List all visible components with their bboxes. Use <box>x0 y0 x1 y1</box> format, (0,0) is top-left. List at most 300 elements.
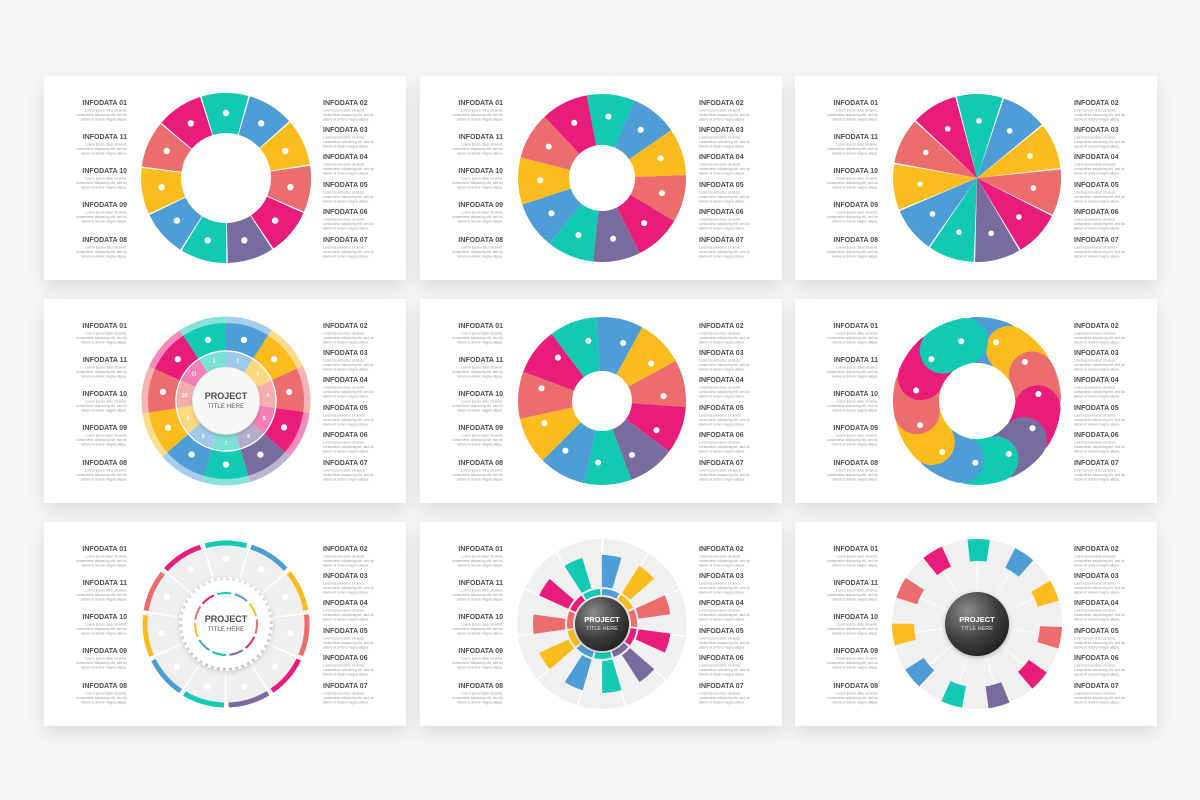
text column left: labore et dolore magna aliqua. <box>457 597 503 601</box>
text column right: INFODATA 06 <box>1074 432 1119 439</box>
text column right: consectetur adipiscing elit, sed do <box>1074 113 1125 117</box>
text column left: Lorem ipsum dolor sit amet, <box>461 108 503 112</box>
text column right: labore et dolore magna aliqua. <box>1074 645 1120 649</box>
text column right: labore et dolore magna aliqua. <box>1074 340 1120 344</box>
text column left: INFODATA 08 <box>82 683 127 690</box>
text column left: labore et dolore magna aliqua. <box>832 631 878 635</box>
text column left: labore et dolore magna aliqua. <box>832 117 878 121</box>
swirl donut chart <box>541 340 663 462</box>
text column right: Lorem ipsum dolor sit amet, <box>323 636 365 640</box>
text column left: INFODATA 09 <box>82 202 127 209</box>
text column left: labore et dolore magna aliqua. <box>832 665 878 669</box>
text column left: Lorem ipsum dolor sit amet, <box>836 434 878 438</box>
text column left: Lorem ipsum dolor sit amet, <box>836 366 878 370</box>
text column left: INFODATA 11 <box>83 134 127 141</box>
text column right: INFODATA 02 <box>699 546 744 553</box>
text column right: consectetur adipiscing elit, sed do <box>1074 336 1125 340</box>
text column left: consectetur adipiscing elit, sed do <box>76 215 127 219</box>
panel background <box>795 76 1157 280</box>
text column right: Lorem ipsum dolor sit amet, <box>1074 414 1116 418</box>
text column right: consectetur adipiscing elit, sed do <box>323 445 374 449</box>
text column right: Lorem ipsum dolor sit amet, <box>699 554 741 558</box>
text column left: Lorem ipsum dolor sit amet, <box>836 554 878 558</box>
text column left: INFODATA 09 <box>833 648 878 655</box>
panel background <box>44 76 406 280</box>
text column left: INFODATA 09 <box>458 425 503 432</box>
text column left: consectetur adipiscing elit, sed do <box>827 250 878 254</box>
text column right: Lorem ipsum dolor sit amet, <box>323 554 365 558</box>
text column right: labore et dolore magna aliqua. <box>323 367 369 371</box>
text column left: labore et dolore magna aliqua. <box>81 340 127 344</box>
text column left: Lorem ipsum dolor sit amet, <box>85 246 127 250</box>
text column right: labore et dolore magna aliqua. <box>323 672 369 676</box>
text column left: labore et dolore magna aliqua. <box>457 374 503 378</box>
step numbers: 7 <box>225 441 228 447</box>
text column right: labore et dolore magna aliqua. <box>699 117 745 121</box>
text column left <box>76 323 127 481</box>
text column right: consectetur adipiscing elit, sed do <box>1074 222 1125 226</box>
text column right: consectetur adipiscing elit, sed do <box>323 363 374 367</box>
text column left: labore et dolore magna aliqua. <box>457 117 503 121</box>
text column right: consectetur adipiscing elit, sed do <box>1074 696 1125 700</box>
text column right: INFODATA 07 <box>1074 683 1119 690</box>
step numbers: 9 <box>186 416 189 422</box>
text column right: labore et dolore magna aliqua. <box>699 226 745 230</box>
text column right: Lorem ipsum dolor sit amet, <box>323 162 365 166</box>
panel background <box>420 299 782 503</box>
text column right: consectetur adipiscing elit, sed do <box>699 250 750 254</box>
text column right: Lorem ipsum dolor sit amet, <box>699 218 741 222</box>
text column left: consectetur adipiscing elit, sed do <box>76 593 127 597</box>
text column left: Lorem ipsum dolor sit amet, <box>85 468 127 472</box>
panel background <box>795 299 1157 503</box>
text column right: INFODATA 07 <box>323 683 368 690</box>
text column right: Lorem ipsum dolor sit amet, <box>1074 608 1116 612</box>
text column left: Lorem ipsum dolor sit amet, <box>461 468 503 472</box>
step numbers: 4 <box>266 393 269 399</box>
icons <box>897 320 1058 480</box>
text column left: Lorem ipsum dolor sit amet, <box>461 210 503 214</box>
icons <box>158 556 294 690</box>
text column left: Lorem ipsum dolor sit amet, <box>85 108 127 112</box>
icons <box>520 318 685 481</box>
colored semicircles <box>549 571 655 677</box>
center title: PROJECT <box>959 615 995 624</box>
text column right: consectetur adipiscing elit, sed do <box>323 418 374 422</box>
text column right: INFODATA 04 <box>699 154 744 161</box>
text column left: consectetur adipiscing elit, sed do <box>827 336 878 340</box>
inner dashed ring <box>188 586 264 662</box>
slide 3: pinwheel pie <box>795 76 1157 280</box>
text column left <box>452 323 503 481</box>
text column right: Lorem ipsum dolor sit amet, <box>1074 468 1116 472</box>
step numbers: 1 <box>213 358 216 364</box>
center title <box>205 614 248 633</box>
text column right: INFODATA 04 <box>1074 154 1119 161</box>
text column right: Lorem ipsum dolor sit amet, <box>699 468 741 472</box>
text column right: INFODATA 02 <box>699 323 744 330</box>
text column right: consectetur adipiscing elit, sed do <box>1074 390 1125 394</box>
text column left: INFODATA 11 <box>834 134 878 141</box>
text column right: labore et dolore magna aliqua. <box>323 117 369 121</box>
text column left: INFODATA 10 <box>833 391 878 398</box>
text column right: consectetur adipiscing elit, sed do <box>1074 363 1125 367</box>
slide 7: star wheel <box>44 522 406 726</box>
text column left: labore et dolore magna aliqua. <box>81 665 127 669</box>
semicircle wheel chart <box>517 539 687 709</box>
text column left: consectetur adipiscing elit, sed do <box>827 215 878 219</box>
text column right: INFODATA 06 <box>1074 209 1119 216</box>
text column left: consectetur adipiscing elit, sed do <box>827 627 878 631</box>
text column right: consectetur adipiscing elit, sed do <box>699 641 750 645</box>
text column left: INFODATA 01 <box>458 323 503 330</box>
text column left: consectetur adipiscing elit, sed do <box>76 473 127 477</box>
text column right: Lorem ipsum dolor sit amet, <box>323 332 365 336</box>
text column right: labore et dolore magna aliqua. <box>699 394 745 398</box>
text column right: INFODATA 07 <box>1074 460 1119 467</box>
text column left <box>452 546 503 704</box>
text column left: Lorem ipsum dolor sit amet, <box>461 692 503 696</box>
text column right: INFODATA 03 <box>1074 573 1119 580</box>
text column left: Lorem ipsum dolor sit amet, <box>836 656 878 660</box>
star wheel chart <box>125 523 327 725</box>
text column right: consectetur adipiscing elit, sed do <box>323 696 374 700</box>
center title: PROJECT <box>205 614 248 624</box>
text column left <box>76 546 127 704</box>
text column right <box>323 100 374 258</box>
text column left: Lorem ipsum dolor sit amet, <box>836 400 878 404</box>
pie chart <box>926 127 1028 229</box>
text column right: labore et dolore magna aliqua. <box>699 144 745 148</box>
text column right: INFODATA 03 <box>699 573 744 580</box>
text column left: INFODATA 09 <box>833 425 878 432</box>
text column right: labore et dolore magna aliqua. <box>323 590 369 594</box>
text column left: INFODATA 09 <box>458 648 503 655</box>
text column right: labore et dolore magna aliqua. <box>1074 617 1120 621</box>
text column left: INFODATA 10 <box>833 614 878 621</box>
text column right: consectetur adipiscing elit, sed do <box>1074 559 1125 563</box>
text column right: labore et dolore magna aliqua. <box>323 477 369 481</box>
text column right: labore et dolore magna aliqua. <box>699 340 745 344</box>
text column right: consectetur adipiscing elit, sed do <box>699 613 750 617</box>
text column left: consectetur adipiscing elit, sed do <box>76 661 127 665</box>
text column right: Lorem ipsum dolor sit amet, <box>1074 332 1116 336</box>
text column right: consectetur adipiscing elit, sed do <box>699 222 750 226</box>
text column left: labore et dolore magna aliqua. <box>832 219 878 223</box>
text column right: labore et dolore magna aliqua. <box>699 645 745 649</box>
text column left: INFODATA 10 <box>82 614 127 621</box>
text column left: Lorem ipsum dolor sit amet, <box>85 434 127 438</box>
colored rim <box>125 523 327 725</box>
text column left: labore et dolore magna aliqua. <box>832 151 878 155</box>
text column right: Lorem ipsum dolor sit amet, <box>699 136 741 140</box>
panel background <box>44 522 406 726</box>
text column left: Lorem ipsum dolor sit amet, <box>85 142 127 146</box>
icons <box>144 318 308 481</box>
text column right: Lorem ipsum dolor sit amet, <box>323 414 365 418</box>
text column right: INFODATA 03 <box>699 127 744 134</box>
text column right: Lorem ipsum dolor sit amet, <box>323 582 365 586</box>
text column right: INFODATA 07 <box>699 460 744 467</box>
text column right: labore et dolore magna aliqua. <box>1074 700 1120 704</box>
slide 6: loop ring <box>795 299 1157 503</box>
text column right: consectetur adipiscing elit, sed do <box>323 336 374 340</box>
text column right: Lorem ipsum dolor sit amet, <box>699 608 741 612</box>
text column left: labore et dolore magna aliqua. <box>81 374 127 378</box>
text column left: Lorem ipsum dolor sit amet, <box>836 622 878 626</box>
text column left <box>76 100 127 258</box>
text column left: labore et dolore magna aliqua. <box>832 254 878 258</box>
text column left: INFODATA 08 <box>458 683 503 690</box>
text column left: INFODATA 11 <box>83 357 127 364</box>
text column left: INFODATA 10 <box>458 614 503 621</box>
text column left: INFODATA 08 <box>833 237 878 244</box>
text column left: labore et dolore magna aliqua. <box>832 563 878 567</box>
text column right: INFODATA 02 <box>1074 546 1119 553</box>
text column right: consectetur adipiscing elit, sed do <box>699 167 750 171</box>
text column right: consectetur adipiscing elit, sed do <box>323 390 374 394</box>
text column left: labore et dolore magna aliqua. <box>81 700 127 704</box>
swirl ring chart <box>534 110 670 246</box>
text column right: Lorem ipsum dolor sit amet, <box>323 136 365 140</box>
text column left: consectetur adipiscing elit, sed do <box>827 559 878 563</box>
text column right <box>323 546 374 704</box>
center title: TITLE HERE <box>208 403 244 410</box>
text column right: labore et dolore magna aliqua. <box>323 449 369 453</box>
text column left: INFODATA 08 <box>833 460 878 467</box>
text column right: INFODATA 06 <box>699 655 744 662</box>
text column left: INFODATA 09 <box>458 202 503 209</box>
text column left: consectetur adipiscing elit, sed do <box>827 181 878 185</box>
text column right: Lorem ipsum dolor sit amet, <box>323 692 365 696</box>
text column right: labore et dolore magna aliqua. <box>699 477 745 481</box>
text column right: INFODATA 03 <box>1074 127 1119 134</box>
text column left: labore et dolore magna aliqua. <box>832 597 878 601</box>
text column right: consectetur adipiscing elit, sed do <box>699 336 750 340</box>
text column right: Lorem ipsum dolor sit amet, <box>1074 108 1116 112</box>
text column right: Lorem ipsum dolor sit amet, <box>699 386 741 390</box>
panel background <box>44 299 406 503</box>
text column left <box>452 100 503 258</box>
text column right: INFODATA 02 <box>699 100 744 107</box>
text column left: Lorem ipsum dolor sit amet, <box>461 656 503 660</box>
text column left: INFODATA 11 <box>83 580 127 587</box>
text column right: consectetur adipiscing elit, sed do <box>323 559 374 563</box>
text column left: Lorem ipsum dolor sit amet, <box>461 622 503 626</box>
step numbers: 3 <box>256 371 259 377</box>
text column left: INFODATA 01 <box>458 546 503 553</box>
text column right: consectetur adipiscing elit, sed do <box>323 113 374 117</box>
text column left: labore et dolore magna aliqua. <box>81 151 127 155</box>
text column left: Lorem ipsum dolor sit amet, <box>461 554 503 558</box>
text column left: INFODATA 09 <box>82 425 127 432</box>
text column left <box>827 546 878 704</box>
text column right: consectetur adipiscing elit, sed do <box>699 390 750 394</box>
text column right <box>699 546 750 704</box>
text column left: Lorem ipsum dolor sit amet, <box>836 176 878 180</box>
center title: TITLE HERE <box>586 626 618 632</box>
text column right: labore et dolore magna aliqua. <box>699 672 745 676</box>
text column left: consectetur adipiscing elit, sed do <box>827 438 878 442</box>
text column left: consectetur adipiscing elit, sed do <box>452 404 503 408</box>
star <box>182 580 270 668</box>
center title <box>193 368 259 434</box>
text column right: consectetur adipiscing elit, sed do <box>323 668 374 672</box>
icons <box>916 116 1039 238</box>
text column left: labore et dolore magna aliqua. <box>81 597 127 601</box>
text column right: Lorem ipsum dolor sit amet, <box>699 108 741 112</box>
text column left: labore et dolore magna aliqua. <box>832 408 878 412</box>
center title <box>575 597 629 651</box>
text column right: consectetur adipiscing elit, sed do <box>1074 473 1125 477</box>
text column right: labore et dolore magna aliqua. <box>323 254 369 258</box>
main segments <box>162 338 290 464</box>
text column right: INFODATA 02 <box>323 100 368 107</box>
text column left: labore et dolore magna aliqua. <box>832 442 878 446</box>
text column right: consectetur adipiscing elit, sed do <box>323 613 374 617</box>
text column right: consectetur adipiscing elit, sed do <box>1074 167 1125 171</box>
text column left: labore et dolore magna aliqua. <box>457 254 503 258</box>
colored triangles <box>896 543 1058 705</box>
text column left: Lorem ipsum dolor sit amet, <box>85 332 127 336</box>
text column right: INFODATA 02 <box>1074 323 1119 330</box>
triangle wheel chart <box>892 539 1062 709</box>
text column right: labore et dolore magna aliqua. <box>1074 590 1120 594</box>
text column right: Lorem ipsum dolor sit amet, <box>699 692 741 696</box>
text column right: Lorem ipsum dolor sit amet, <box>1074 358 1116 362</box>
text column left: labore et dolore magna aliqua. <box>81 408 127 412</box>
text column right: Lorem ipsum dolor sit amet, <box>323 386 365 390</box>
text column right: consectetur adipiscing elit, sed do <box>699 113 750 117</box>
text column left: INFODATA 08 <box>833 683 878 690</box>
text column right: labore et dolore magna aliqua. <box>699 171 745 175</box>
text column right: labore et dolore magna aliqua. <box>323 617 369 621</box>
text column left: consectetur adipiscing elit, sed do <box>76 181 127 185</box>
text column left: labore et dolore magna aliqua. <box>832 340 878 344</box>
text column right: labore et dolore magna aliqua. <box>323 394 369 398</box>
text column right: INFODATA 04 <box>323 154 368 161</box>
text column right <box>323 323 374 481</box>
text column right: consectetur adipiscing elit, sed do <box>1074 641 1125 645</box>
text column right: INFODATA 07 <box>323 460 368 467</box>
wheel chart <box>145 320 307 482</box>
text column right: consectetur adipiscing elit, sed do <box>323 222 374 226</box>
inner pastel ring <box>184 359 268 443</box>
text column right: Lorem ipsum dolor sit amet, <box>699 582 741 586</box>
text column right: labore et dolore magna aliqua. <box>699 449 745 453</box>
text column right: consectetur adipiscing elit, sed do <box>1074 250 1125 254</box>
text column left: consectetur adipiscing elit, sed do <box>452 181 503 185</box>
text column right: labore et dolore magna aliqua. <box>699 563 745 567</box>
text column right: INFODATA 03 <box>323 573 368 580</box>
text column right: INFODATA 06 <box>699 432 744 439</box>
text column right: consectetur adipiscing elit, sed do <box>323 586 374 590</box>
text column left: Lorem ipsum dolor sit amet, <box>461 142 503 146</box>
text column left: Lorem ipsum dolor sit amet, <box>85 588 127 592</box>
text column right: Lorem ipsum dolor sit amet, <box>323 358 365 362</box>
text column right: labore et dolore magna aliqua. <box>1074 394 1120 398</box>
text column right: labore et dolore magna aliqua. <box>699 199 745 203</box>
text column right: INFODATA 02 <box>323 323 368 330</box>
text column left: Lorem ipsum dolor sit amet, <box>85 622 127 626</box>
text column left: consectetur adipiscing elit, sed do <box>452 473 503 477</box>
text column left: Lorem ipsum dolor sit amet, <box>85 176 127 180</box>
step numbers <box>182 358 269 447</box>
text column left: consectetur adipiscing elit, sed do <box>827 404 878 408</box>
text column right: INFODATA 05 <box>323 182 368 189</box>
text column right: Lorem ipsum dolor sit amet, <box>323 608 365 612</box>
text column left: INFODATA 01 <box>833 100 878 107</box>
text column right: consectetur adipiscing elit, sed do <box>323 250 374 254</box>
text column left: consectetur adipiscing elit, sed do <box>827 593 878 597</box>
text column right: INFODATA 07 <box>699 683 744 690</box>
text column right: consectetur adipiscing elit, sed do <box>699 473 750 477</box>
text column left: consectetur adipiscing elit, sed do <box>827 147 878 151</box>
text column left: Lorem ipsum dolor sit amet, <box>461 176 503 180</box>
text column right: labore et dolore magna aliqua. <box>1074 171 1120 175</box>
text column left: Lorem ipsum dolor sit amet, <box>836 332 878 336</box>
text column left: INFODATA 10 <box>458 168 503 175</box>
text column left: Lorem ipsum dolor sit amet, <box>836 588 878 592</box>
center title <box>945 592 1009 656</box>
text column left: labore et dolore magna aliqua. <box>81 254 127 258</box>
text column left: INFODATA 01 <box>458 100 503 107</box>
text column right: consectetur adipiscing elit, sed do <box>323 140 374 144</box>
text column left: consectetur adipiscing elit, sed do <box>452 627 503 631</box>
text column left: consectetur adipiscing elit, sed do <box>452 250 503 254</box>
text column left: INFODATA 08 <box>458 460 503 467</box>
text column right: INFODATA 05 <box>1074 405 1119 412</box>
text column right: Lorem ipsum dolor sit amet, <box>323 664 365 668</box>
text column right: Lorem ipsum dolor sit amet, <box>1074 636 1116 640</box>
text column right: labore et dolore magna aliqua. <box>1074 477 1120 481</box>
text column right: INFODATA 05 <box>1074 182 1119 189</box>
text column left: INFODATA 11 <box>459 357 503 364</box>
text column right: INFODATA 07 <box>323 237 368 244</box>
step numbers: 10 <box>182 393 187 399</box>
text column left: labore et dolore magna aliqua. <box>457 185 503 189</box>
text column left: Lorem ipsum dolor sit amet, <box>461 366 503 370</box>
text column right: Lorem ipsum dolor sit amet, <box>699 664 741 668</box>
text column right: labore et dolore magna aliqua. <box>699 422 745 426</box>
text column right: INFODATA 05 <box>699 182 744 189</box>
text column right: INFODATA 04 <box>323 377 368 384</box>
text column left: Lorem ipsum dolor sit amet, <box>836 210 878 214</box>
text column left: labore et dolore magna aliqua. <box>457 563 503 567</box>
text column right: Lorem ipsum dolor sit amet, <box>699 162 741 166</box>
text column right: Lorem ipsum dolor sit amet, <box>323 246 365 250</box>
center title: PROJECT <box>205 391 248 401</box>
text column left: INFODATA 11 <box>834 357 878 364</box>
text column right: labore et dolore magna aliqua. <box>699 590 745 594</box>
text column right <box>1074 323 1125 481</box>
text column right: labore et dolore magna aliqua. <box>1074 144 1120 148</box>
text column left: Lorem ipsum dolor sit amet, <box>461 332 503 336</box>
slide 8: semicircle wheel <box>420 522 782 726</box>
text column right: INFODATA 04 <box>1074 600 1119 607</box>
text column right: consectetur adipiscing elit, sed do <box>1074 668 1125 672</box>
text column right: consectetur adipiscing elit, sed do <box>699 363 750 367</box>
text column right: Lorem ipsum dolor sit amet, <box>323 440 365 444</box>
text column right: Lorem ipsum dolor sit amet, <box>699 636 741 640</box>
text column right: consectetur adipiscing elit, sed do <box>1074 586 1125 590</box>
text column left: consectetur adipiscing elit, sed do <box>452 370 503 374</box>
text column left: INFODATA 01 <box>833 546 878 553</box>
text column right: consectetur adipiscing elit, sed do <box>323 167 374 171</box>
text column right <box>1074 546 1125 704</box>
text column right: labore et dolore magna aliqua. <box>699 617 745 621</box>
text column right: labore et dolore magna aliqua. <box>323 171 369 175</box>
